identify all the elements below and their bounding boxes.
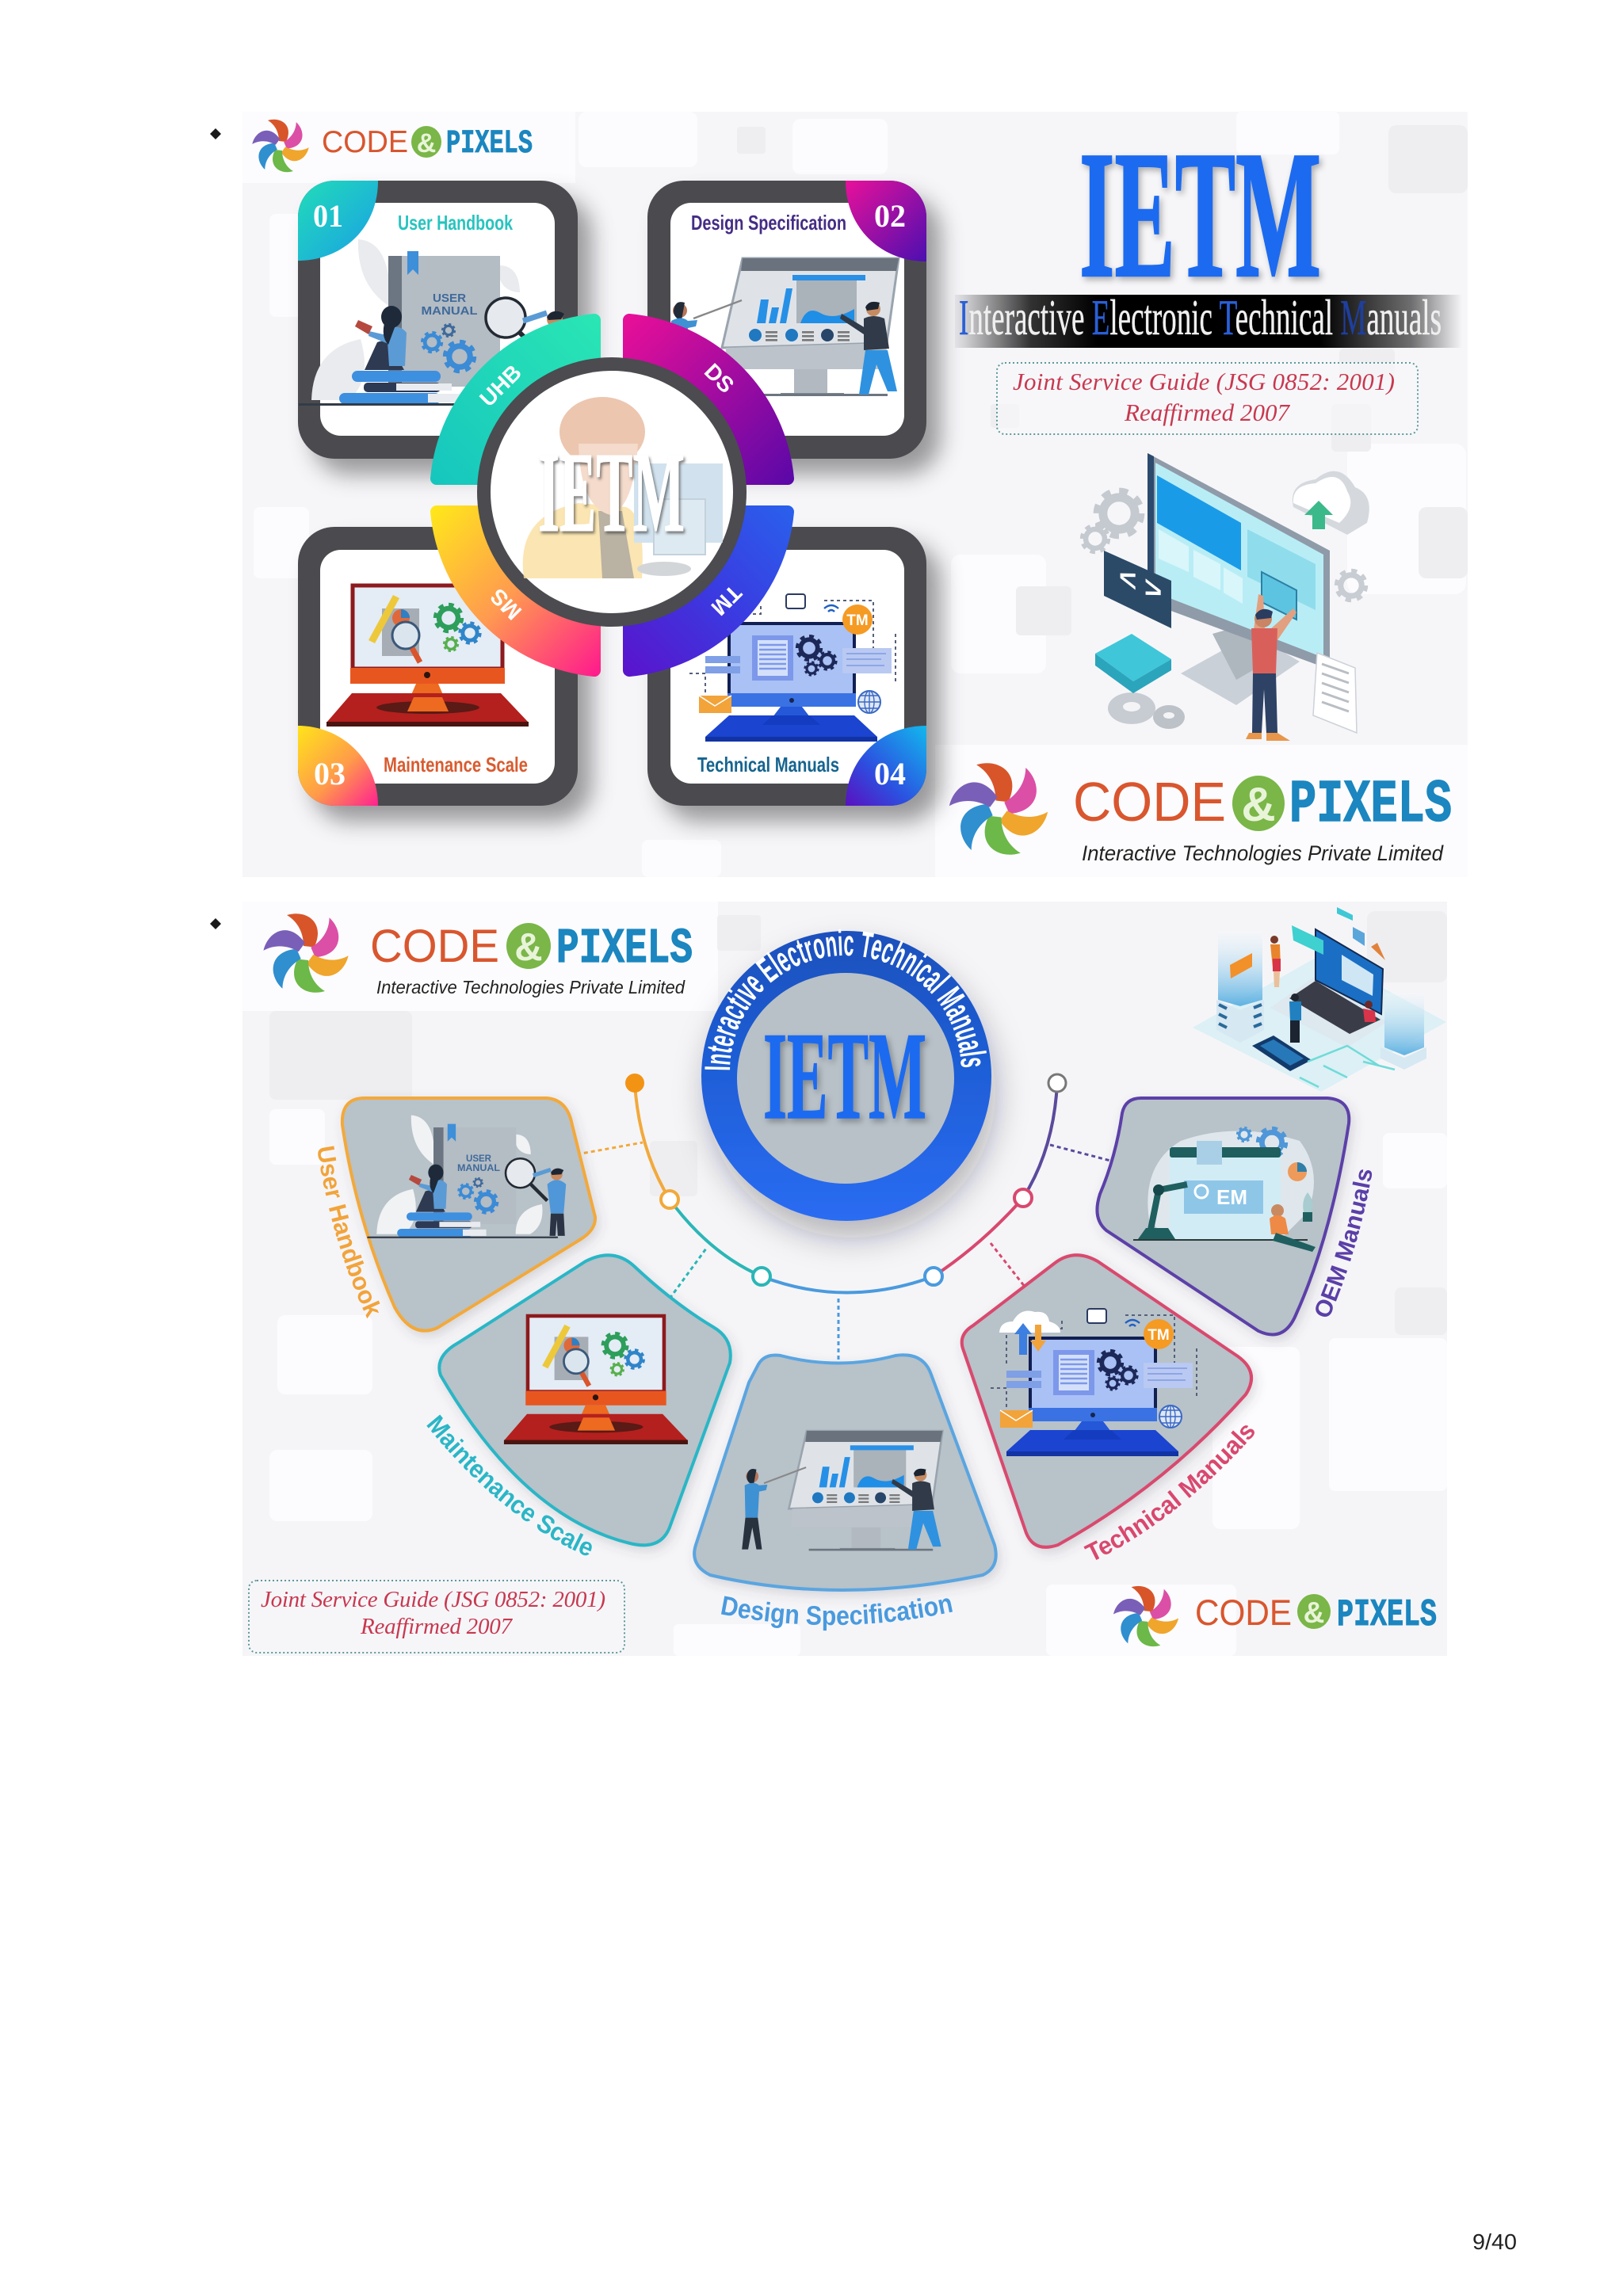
blob shape <box>342 1098 595 1331</box>
illustration: blue monitor <box>991 1309 1197 1456</box>
timeline arc <box>577 1074 1113 1360</box>
corner badge 04 <box>846 726 926 806</box>
ampersand badge <box>411 126 441 158</box>
TM badge label: TM <box>846 612 869 629</box>
icon: pinwheel <box>251 120 310 172</box>
code panel <box>1104 551 1171 628</box>
blob shape <box>694 1355 996 1590</box>
PIXELS wordmark: PIXELS <box>1289 771 1452 839</box>
hub ring <box>477 357 747 627</box>
segment DS <box>629 320 788 479</box>
line 1: Joint Service Guide (JSG 0852: 2001) <box>261 1587 605 1612</box>
card frame <box>298 181 578 459</box>
ampersand badge <box>1232 776 1285 831</box>
illustration: user manual: USER <box>466 1153 491 1164</box>
central wheel <box>437 320 788 670</box>
label MS: MS <box>486 584 526 624</box>
illustration: isometric laptop platform <box>1193 907 1446 1092</box>
line 1: Joint Service Guide (JSG 0852: 2001) <box>1013 368 1395 395</box>
ampersand badge: & <box>1241 778 1276 831</box>
number 02: 02 <box>874 198 906 234</box>
monitor <box>1148 453 1330 669</box>
illustration: user manual book <box>299 239 567 406</box>
number 04: 04 <box>874 756 906 791</box>
gears <box>1082 491 1365 729</box>
label UHB: UHB <box>475 360 526 411</box>
subtitle band <box>955 289 1462 348</box>
panel: IETM document types arc <box>242 902 1447 1656</box>
card 02: Design Specification <box>647 181 926 459</box>
card frame <box>298 527 578 806</box>
number 01: 01 <box>313 198 343 234</box>
blob: Technical Manuals <box>960 1253 1258 1560</box>
segment MS <box>437 512 594 670</box>
label: Design Specification <box>721 1596 953 1630</box>
panel: IETM four-card overview: IETM <box>1079 113 1321 315</box>
blob: OEM Manuals <box>1095 1097 1373 1344</box>
illustration: dashboard <box>742 1431 942 1550</box>
illustration: OEM robot window: EM <box>1216 1185 1247 1209</box>
icon: pinwheel <box>262 913 349 993</box>
black band <box>955 295 1462 348</box>
page number: 9/40 <box>1472 2229 1517 2254</box>
logo: small Code & Pixels top-left <box>251 120 533 172</box>
blob: User Handbook <box>318 1097 602 1341</box>
dotted box <box>249 1581 624 1653</box>
blob shape <box>1097 1098 1349 1334</box>
illustration: user manual book: MANUAL <box>422 304 477 318</box>
blob shape <box>439 1255 731 1545</box>
illustration: red monitor <box>327 585 529 727</box>
logo: Code & Pixels large with tagline <box>948 763 1452 865</box>
label: Technical Manuals <box>1084 1425 1254 1560</box>
blob shape <box>962 1255 1251 1547</box>
code panel: > <box>1144 570 1162 610</box>
label: Maintenance Scale <box>426 1415 592 1556</box>
blob: Design Specification <box>693 1353 1003 1630</box>
line 2: Reaffirmed 2007 <box>1124 399 1290 426</box>
outer blue ring <box>701 931 991 1221</box>
ampersand badge: & <box>1304 1596 1324 1629</box>
tagline: Interactive Technologies Private Limited <box>376 977 685 997</box>
illustration: blue monitor <box>689 594 896 742</box>
card 01: User Handbook <box>298 181 578 459</box>
number 03: 03 <box>314 756 346 791</box>
bullet: second image <box>210 918 221 929</box>
panel background <box>242 902 1447 1656</box>
illustration: user manual book: USER <box>433 292 466 305</box>
CODE wordmark: CODE <box>1073 771 1226 833</box>
card frame <box>647 181 926 459</box>
segment TM <box>629 512 788 670</box>
bullet: first image <box>210 128 221 139</box>
inner grey disc <box>737 973 954 1184</box>
ampersand badge <box>506 923 551 969</box>
card title: Maintenance Scale <box>384 753 528 776</box>
dashed connectors <box>577 1142 643 1154</box>
CODE wordmark: CODE <box>370 921 499 972</box>
ampersand badge <box>1297 1594 1331 1629</box>
card title: Design Specification <box>691 211 846 235</box>
icon: pinwheel <box>1113 1586 1179 1646</box>
callout: joint service guide <box>249 1581 624 1653</box>
label DS: DS <box>700 359 739 398</box>
cloud with arrows <box>999 1310 1060 1355</box>
label TM: TM <box>706 580 747 620</box>
TM badge label: TM <box>1148 1327 1170 1344</box>
panel: IETM four-card overview <box>242 111 1468 877</box>
card title: Technical Manuals <box>697 753 839 776</box>
card title: User Handbook <box>398 211 513 235</box>
ampersand badge: & <box>417 128 436 158</box>
card 03: Maintenance Scale <box>298 527 578 806</box>
illustration: red monitor <box>504 1316 688 1444</box>
PIXELS wordmark: PIXELS <box>1337 1594 1437 1637</box>
dotted box <box>997 363 1418 434</box>
corner badge 03 <box>298 726 378 806</box>
blob: Maintenance Scale <box>426 1253 739 1556</box>
IETM emblem: Interactive Electronic Technical Manuals <box>705 929 987 1070</box>
icon: pinwheel <box>948 763 1049 855</box>
subtitle text: Interactive Electronic Technical Manuals <box>959 289 1442 345</box>
central wheel: IETM <box>538 429 685 556</box>
code panel: < <box>1119 559 1136 599</box>
line 2: Reaffirmed 2007 <box>360 1614 514 1639</box>
segment UHB <box>437 320 594 479</box>
IETM emblem: IETM <box>763 1007 926 1146</box>
illustration: isometric monitor with person <box>1082 453 1369 741</box>
label: OEM Manuals <box>1316 1169 1373 1317</box>
logo: Code & Pixels bottom-right <box>1113 1586 1437 1646</box>
tagline: Interactive Technologies Private Limited <box>1082 841 1444 865</box>
card inner <box>320 550 555 784</box>
ampersand badge: & <box>514 926 543 969</box>
card inner <box>670 550 904 784</box>
label: User Handbook <box>318 1146 380 1318</box>
CODE wordmark: CODE <box>322 125 408 159</box>
circular text <box>730 955 961 1071</box>
cloud with arrow <box>1293 471 1369 535</box>
timeline nodes <box>625 1074 1066 1285</box>
panel background <box>242 112 1468 877</box>
illustration: OEM robot window <box>1133 1127 1316 1252</box>
PIXELS wordmark: PIXELS <box>446 124 533 162</box>
illustration: user manual: MANUAL <box>457 1162 500 1173</box>
image stack <box>1095 634 1171 681</box>
corner badge 01 <box>298 181 378 261</box>
IETM emblem <box>688 929 1014 1253</box>
logo: Code & Pixels with tagline <box>262 913 693 997</box>
card 04: Technical Manuals <box>647 527 926 806</box>
illustration: dashboard presentation <box>668 258 899 396</box>
person <box>1246 594 1296 741</box>
illustration: user manual <box>367 1115 566 1238</box>
corner badge 02 <box>846 181 926 261</box>
callout: joint service guide <box>997 363 1418 434</box>
hub white disc <box>491 371 733 613</box>
document <box>1313 653 1357 733</box>
card frame <box>647 527 926 806</box>
faded person at computer <box>523 397 723 578</box>
card inner <box>670 203 904 436</box>
card inner <box>320 203 555 436</box>
monitor stand <box>1181 634 1300 705</box>
CODE wordmark: CODE <box>1195 1592 1292 1633</box>
PIXELS wordmark: PIXELS <box>556 921 693 977</box>
